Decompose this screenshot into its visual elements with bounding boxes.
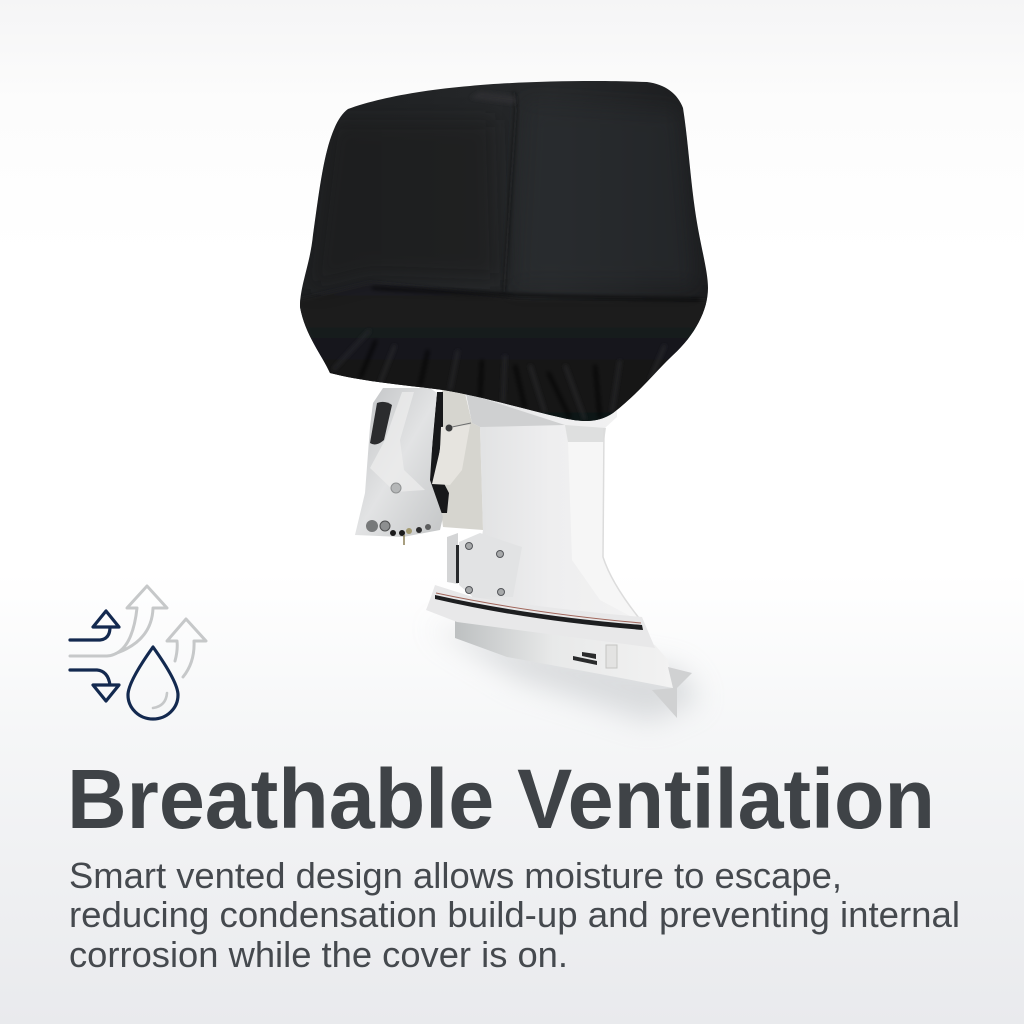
cavitation plate [426,585,655,648]
exhaust vents [573,645,617,668]
icon: water drop [128,647,178,719]
description text: corrosion while the cover is on. [69,934,568,975]
cover folds [300,295,707,421]
ground shadow [430,625,700,722]
dark gap [420,392,449,513]
title: Breathable Ventilation [67,752,935,846]
lower unit [455,620,673,688]
side plate [447,533,522,597]
description text: Smart vented design allows moisture to escape, [69,855,842,896]
red and black stripes [435,593,643,630]
description text [69,855,960,975]
motor cover [295,81,715,430]
icon: airflow and water drop [70,586,206,719]
motor leg [465,390,655,647]
clamp bracket details [366,392,431,545]
icon: drop highlight [153,693,167,708]
icon: navy airflow arrows [70,611,119,701]
leg shading details [466,393,643,623]
description text: reducing condensation build-up and preventing internal [69,894,960,935]
product photo: outboard motor with cover [295,81,715,722]
icon: grey airflow arrows [70,586,206,677]
clamp bracket [355,388,443,537]
swivel linkage [432,423,471,485]
swivel bracket [437,390,483,530]
skeg [652,667,692,718]
